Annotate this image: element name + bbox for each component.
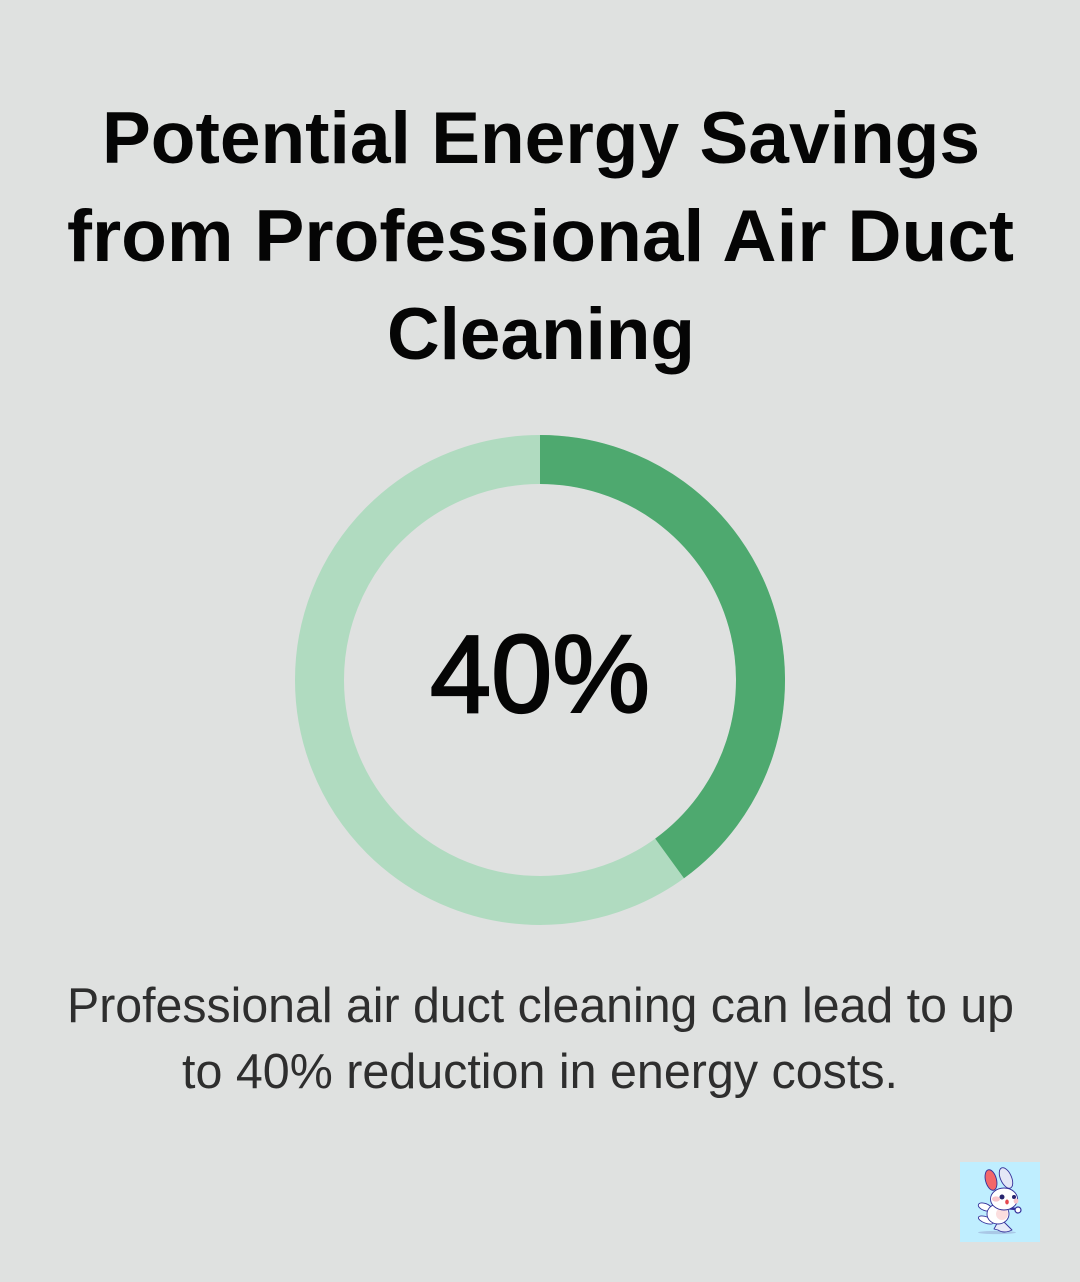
donut track (320, 460, 760, 900)
title: Potential Energy Savings (102, 98, 980, 179)
description text: to 40% reduction in energy costs. (182, 1045, 898, 1099)
donut value segment (540, 460, 761, 858)
title: from Professional Air Duct (67, 196, 1014, 277)
donut value label: 40% (430, 613, 650, 736)
icon: rabbit logo (960, 1162, 1040, 1242)
title: Cleaning (387, 294, 695, 375)
description text (67, 979, 1014, 1099)
description text: Professional air duct cleaning can lead to up (67, 979, 1014, 1033)
title (67, 98, 1014, 375)
donut chart: 40% (320, 460, 761, 900)
